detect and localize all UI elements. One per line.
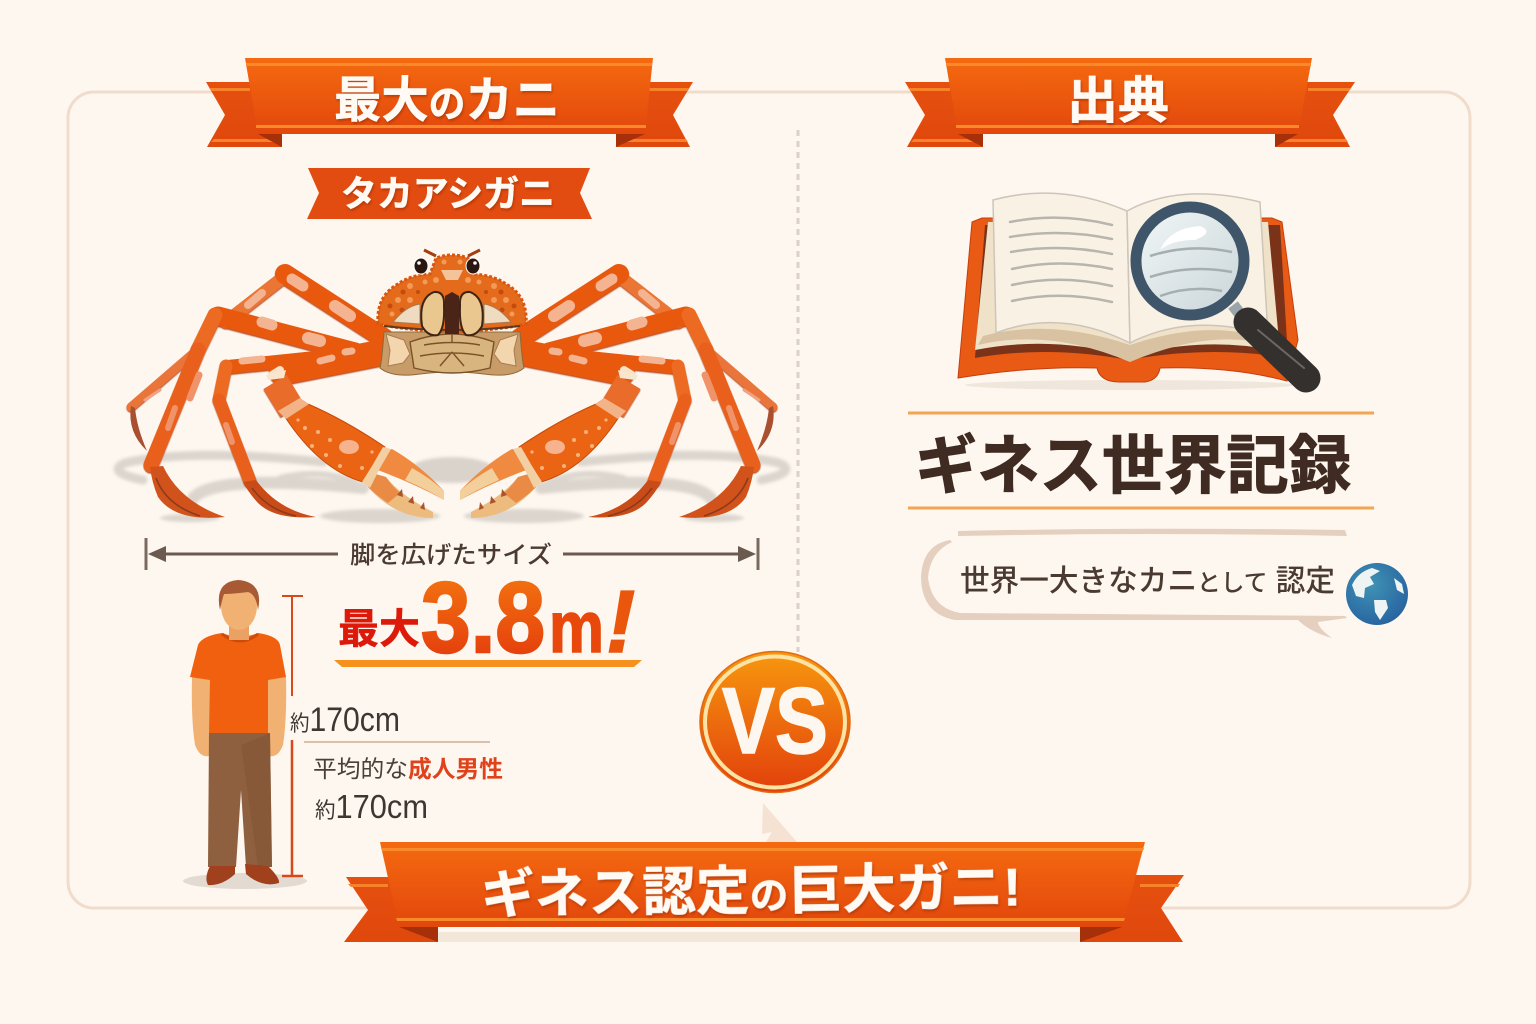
pants [208, 733, 272, 867]
caption: 平均的な成人男性: 平均的な成人男性 [313, 756, 503, 782]
head [424, 250, 480, 256]
head [229, 622, 249, 640]
crab shadow [118, 455, 786, 523]
heading: ギネス世界記録: ギネス世界記録 [915, 430, 1351, 502]
icon: human figure [183, 580, 307, 889]
dimension arrow: 脚を広げたサイズ [146, 538, 758, 570]
VS badge: VS [722, 668, 828, 773]
callout: 最大3.8m!: ! [606, 572, 635, 671]
text lines [1010, 218, 1112, 302]
callout: 最大3.8m!: m [549, 588, 604, 668]
species name: タカアシガニ [341, 173, 555, 214]
sternum [380, 332, 524, 375]
shoes [206, 866, 235, 885]
caption: 平均的な成人男性 [313, 756, 503, 825]
frills [393, 304, 420, 324]
speech bubble [921, 529, 1347, 638]
crab body [378, 250, 526, 375]
banner text: ギネス認定の巨大ガニ! [481, 858, 1021, 925]
carapace [378, 255, 526, 332]
joints [386, 334, 410, 366]
book cover [958, 218, 1298, 382]
magnifier [1136, 207, 1306, 378]
sub banner: タカアシガニ [307, 168, 592, 219]
arms [192, 676, 214, 756]
icon: globe [1346, 563, 1408, 625]
height scale bar [282, 595, 303, 877]
icon: book and magnifier [958, 193, 1306, 390]
dimension label: 脚を広げたサイズ [350, 542, 552, 569]
heading text: 出典 [1067, 73, 1169, 129]
callout: 最大3.8m! [334, 562, 642, 674]
shirt [190, 633, 286, 733]
height label: 約170cm [290, 701, 400, 739]
pages [993, 193, 1130, 343]
callout: 最大3.8m!: 3.8 [421, 562, 545, 674]
banner: ギネス認定の巨大ガニ! [344, 842, 1184, 942]
callout: 最大3.8m!: 最大 [338, 606, 420, 652]
panel: main frame [68, 92, 1470, 908]
illustration: crab [118, 250, 786, 523]
mouth plates [445, 292, 459, 334]
page stack [975, 222, 1280, 356]
heading text: 最大のカニ [334, 74, 560, 128]
spark wedge [762, 803, 797, 842]
caption: 平均的な成人男性: 約170cm [315, 788, 428, 825]
VS badge [700, 652, 850, 792]
banner: 最大のカニ [206, 58, 693, 147]
banner: 出典 [905, 58, 1355, 147]
bubble text: 世界一大きなカニとして 認定 [960, 565, 1335, 598]
